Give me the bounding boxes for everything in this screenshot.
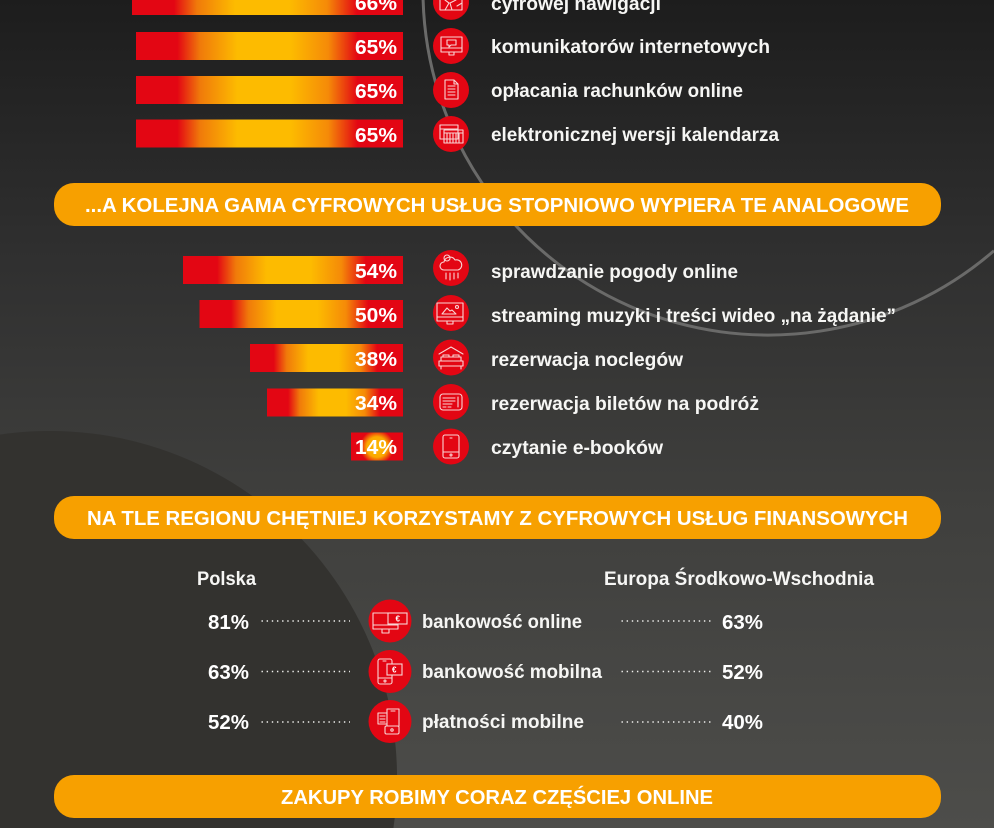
row: bilety: rezerwacja biletów na podróż — [491, 393, 759, 415]
row: rachunki: opłacania rachunków online — [491, 80, 743, 102]
row: bankowość online — [208, 600, 763, 642]
row: streaming: streaming muzyki i treści wideo „na żądanie” — [491, 305, 896, 327]
row: rachunki — [136, 72, 743, 108]
row: noclegi: rezerwacja noclegów — [491, 349, 684, 371]
section: top digital services list — [132, 0, 779, 152]
row: bankowość mobilna: bankowość mobilna — [422, 661, 602, 683]
row: bilety — [267, 384, 759, 420]
heading banner: zakupy — [54, 775, 941, 818]
row: bankowość online: € — [396, 614, 400, 624]
section: regional comparison — [197, 566, 874, 743]
row: bilety: 34% — [355, 392, 397, 415]
row: bankowość online: 63% — [722, 611, 763, 634]
row: cyfrowa nawigacja — [132, 0, 661, 20]
row: e-booki — [351, 428, 664, 464]
row: komunikatory — [136, 28, 770, 64]
row: płatności mobilne: płatności mobilne — [422, 711, 584, 733]
row: pogoda — [183, 250, 738, 286]
row: streaming — [200, 295, 896, 331]
row: bankowość online: bankowość online — [422, 611, 582, 633]
row: e-booki: czytanie e-booków — [491, 437, 664, 459]
heading banner: na tle regionu: NA TLE REGIONU CHĘTNIEJ KORZYSTAMY Z CYFROWYCH USŁUG FINANSOWYCH — [87, 508, 908, 530]
row: bankowość mobilna: 63% — [208, 661, 249, 684]
row: płatności mobilne: 52% — [208, 711, 249, 734]
column heading: Europa Środkowo-Wschodnia: Europa Środkowo-Wschodnia — [604, 566, 874, 590]
column heading: Polska: Polska — [197, 568, 256, 590]
row: pogoda: 54% — [355, 260, 397, 283]
row: komunikatory: komunikatorów internetowych — [491, 36, 770, 58]
heading banner: kolejna gama usług: ...A KOLEJNA GAMA CYFROWYCH USŁUG STOPNIOWO WYPIERA TE ANALOGOWE — [85, 195, 909, 217]
row: noclegi: 38% — [355, 348, 397, 371]
row: bankowość mobilna: 52% — [722, 661, 763, 684]
row: kalendarz — [136, 116, 779, 152]
row: noclegi — [250, 340, 684, 376]
row: bankowość mobilna: € — [392, 666, 397, 674]
row: pogoda: sprawdzanie pogody online — [491, 261, 738, 283]
row: komunikatory: 65% — [355, 36, 397, 59]
row: płatności mobilne: 40% — [722, 711, 763, 734]
heading banner: na tle regionu — [54, 496, 941, 539]
row: kalendarz: 65% — [355, 124, 397, 147]
row: kalendarz: elektronicznej wersji kalendarza — [491, 124, 779, 146]
heading banner: kolejna gama usług — [54, 183, 941, 226]
row: streaming: 50% — [355, 304, 397, 327]
row: rachunki: 65% — [355, 80, 397, 103]
section: analog replacement list — [183, 250, 896, 464]
row: e-booki: 14% — [355, 436, 397, 459]
row: płatności mobilne — [208, 700, 763, 743]
heading banner: zakupy: ZAKUPY ROBIMY CORAZ CZĘŚCIEJ ONLINE — [281, 785, 713, 809]
row: bankowość mobilna — [208, 650, 763, 693]
row: bankowość online: 81% — [208, 611, 249, 634]
